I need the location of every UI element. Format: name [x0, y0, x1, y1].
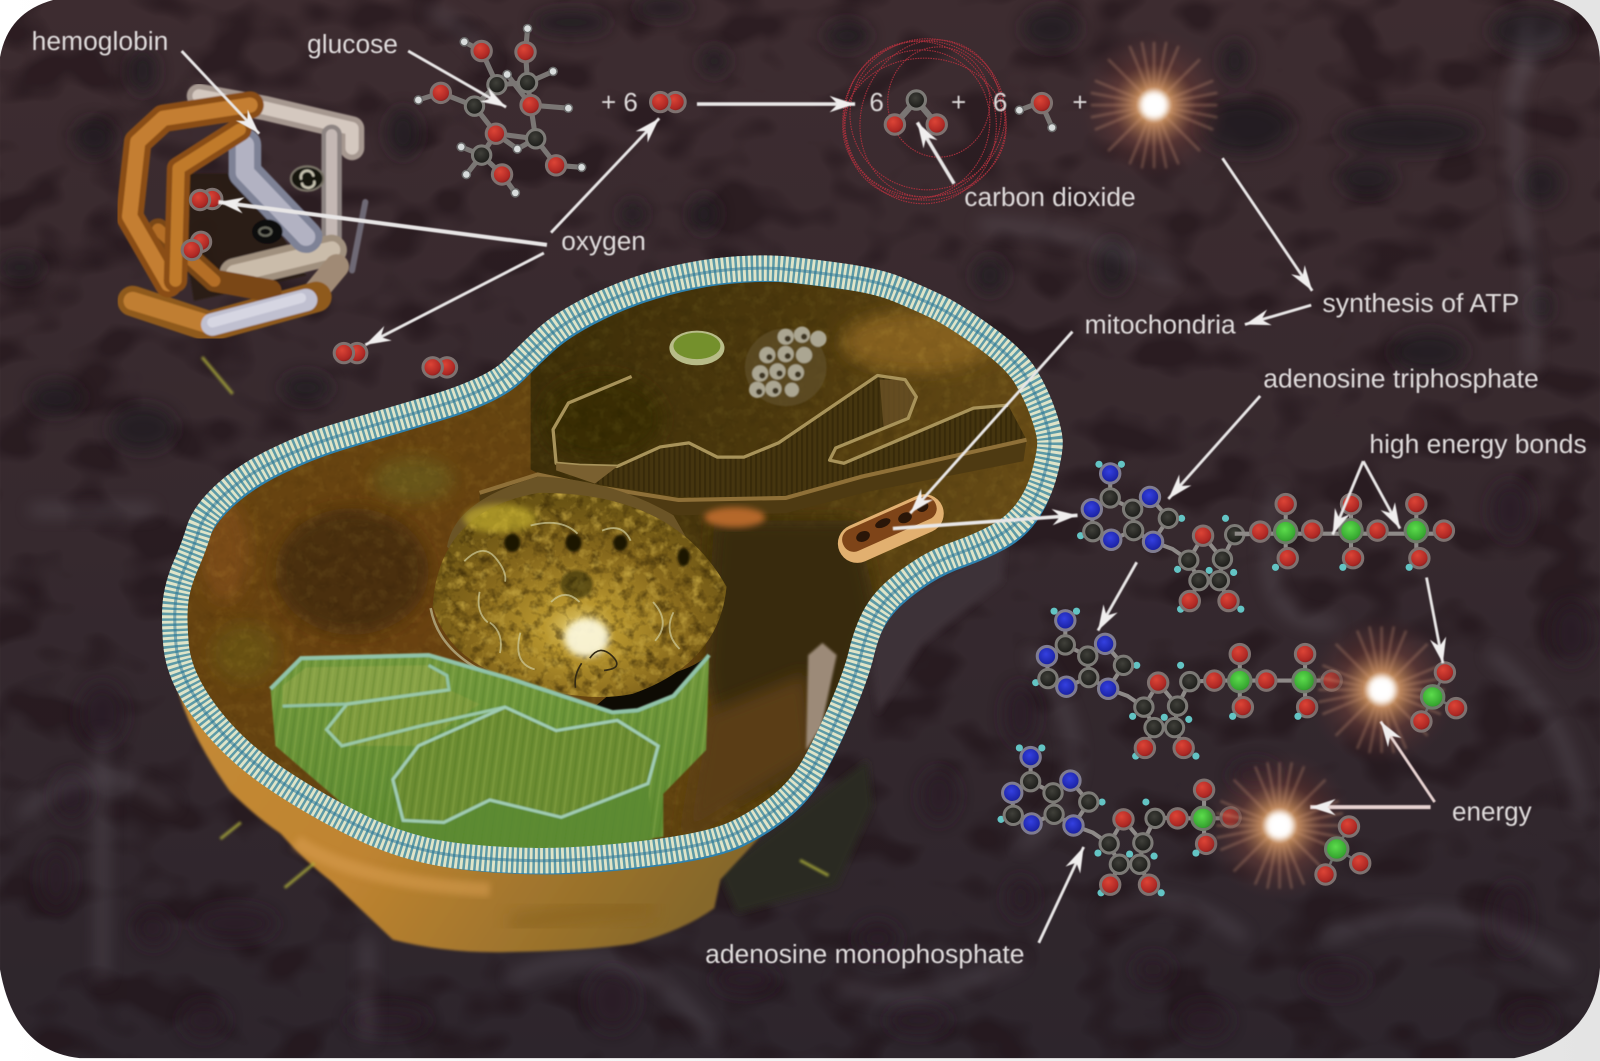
nucleus: [431, 477, 727, 719]
arrow: phosphate release: [1427, 578, 1443, 663]
arrow: mitochondria label: [910, 332, 1072, 513]
arrow: carbon dioxide label: [917, 122, 954, 184]
endoplasmic reticulum folds: [480, 376, 1027, 528]
arrow: synthesis to mitochondria: [1245, 305, 1311, 324]
lipid bilayer membrane: [175, 268, 1055, 870]
arrow: high energy bond two: [1363, 461, 1400, 529]
arrow: energy to lower flare: [1310, 805, 1431, 809]
icon: red scribble around carbon dioxide: [818, 20, 1023, 226]
arrow: ATP to ADP: [1098, 562, 1137, 631]
icon: water molecule: [1015, 93, 1056, 132]
arrow: high energy bond one: [1333, 461, 1363, 535]
cell interior floor: [188, 282, 1038, 840]
cell outer wall underside: [176, 541, 1005, 952]
label: adenosine monophosphate: adenosine monophosphate: [705, 939, 1024, 969]
arrow: mitochondrion to ATP: [893, 515, 1078, 529]
arrow: reaction direction: [697, 102, 855, 106]
yellow green needles: [202, 357, 829, 888]
chart: ATP molecule: [1077, 461, 1454, 613]
label: energy: energy: [1452, 796, 1532, 826]
arrow: oxygen to hemoglobin: [218, 202, 547, 245]
grey strand by hemoglobin: [352, 202, 365, 270]
label: carbon dioxide: carbon dioxide: [964, 182, 1136, 212]
icon: glucose molecule: [414, 24, 586, 197]
label: high energy bonds: high energy bonds: [1369, 429, 1587, 459]
icon: energy flare top: [1079, 30, 1230, 181]
mitochondrion: [832, 488, 950, 569]
arrow: hemoglobin label: [182, 51, 259, 134]
icon: carbon dioxide molecule: [885, 91, 946, 134]
arrow: energy to ATP synthesis: [1222, 158, 1312, 291]
label: hemoglobin: hemoglobin: [32, 26, 168, 56]
icon: hemoglobin molecule: [130, 96, 365, 327]
green folded organelle: [270, 655, 709, 855]
label: glucose: glucose: [307, 29, 398, 59]
arrows: [182, 51, 1443, 943]
icon: free oxygen molecule 1: [334, 343, 367, 363]
icon: free oxygen molecule 2: [423, 358, 457, 377]
equation: six: 6: [869, 87, 884, 117]
chart: ADP molecule with energy release: [1032, 608, 1466, 765]
heme groups: [252, 166, 323, 244]
grey protein chains: [199, 96, 352, 297]
icon: oxygen in hemoglobin, upper: [190, 189, 222, 210]
arrow: adenosine monophosphate label: [1039, 847, 1084, 943]
arrow: energy to upper flare: [1381, 721, 1435, 802]
arrow: adenosine triphosphate label: [1168, 396, 1260, 499]
arrow: glucose label: [408, 51, 506, 107]
equation: six water: 6: [993, 87, 1007, 117]
green disc organelle: [669, 331, 724, 365]
equation: plus: +: [951, 87, 966, 117]
label: oxygen: oxygen: [561, 226, 646, 256]
label: synthesis of ATP: synthesis of ATP: [1322, 288, 1519, 318]
equation: plus energy: +: [1072, 87, 1088, 117]
chart: AMP molecule with energy release: [997, 744, 1370, 901]
panel: cell cross-section: [163, 255, 1071, 952]
icon: oxygen molecule in equation: [651, 92, 685, 112]
arrow: oxygen to equation: [551, 118, 659, 233]
icon: oxygen in hemoglobin, lower: [182, 232, 211, 260]
orange protein chains: [130, 105, 316, 327]
label: mitochondria: mitochondria: [1085, 310, 1236, 340]
equation: plus six: + 6: [601, 87, 638, 117]
arrow: oxygen to free molecule: [365, 253, 544, 345]
label: adenosine triphosphate: adenosine triphosphate: [1263, 364, 1539, 394]
vesicle stack: [745, 327, 827, 406]
